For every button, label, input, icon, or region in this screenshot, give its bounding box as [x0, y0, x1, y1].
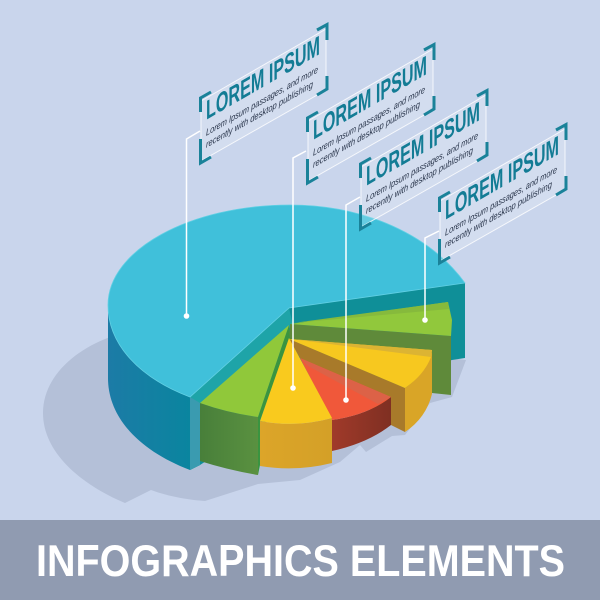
green left edge [258, 325, 290, 475]
red slice [300, 358, 391, 451]
panel 3 heading: LOREM IPSUM [366, 97, 480, 192]
label panel 1 [200, 24, 327, 163]
yellow centre top [260, 338, 332, 424]
red top [300, 358, 391, 420]
pie shadow [43, 337, 466, 503]
yellow right cut side [289, 339, 405, 432]
red back strip [300, 358, 391, 404]
large slice: corner strip [190, 397, 200, 470]
large slice: cut face near corner [190, 308, 293, 470]
panel 3 body line 2: recently with desktop publishing [366, 145, 473, 217]
large slice: top [108, 205, 465, 397]
yellow slice centre [260, 338, 332, 468]
yellow slice right [289, 339, 432, 432]
footer band [0, 520, 600, 600]
panel 3 brackets [360, 90, 487, 229]
leader line 3 [343, 197, 360, 403]
panel 4 brackets [440, 124, 566, 263]
large slice: outer wall [108, 305, 190, 470]
panel 1 body: Lorem Ipsum passages, and more [206, 65, 318, 139]
yellow right outer side [405, 352, 432, 432]
panel 2 heading: LOREM IPSUM [313, 51, 427, 146]
green right side [289, 324, 451, 395]
leader line 4 [422, 231, 439, 323]
green left top [200, 325, 289, 417]
label panel 4 [440, 124, 566, 263]
panel 4 card [440, 129, 565, 261]
red side [332, 397, 391, 451]
panel 2 body: Lorem Ipsum passages, and more [313, 85, 425, 159]
panel 1 brackets [200, 24, 327, 163]
yellow right back strip [291, 339, 432, 357]
yellow right top [289, 339, 432, 388]
panel 3 card [361, 95, 486, 227]
leader line 1 [184, 131, 200, 319]
label panel 3 [360, 90, 487, 229]
green slice left [200, 325, 290, 475]
green left side [200, 403, 258, 475]
green right back strip [293, 302, 449, 323]
large slice: inner cut faces [190, 283, 465, 470]
pie chart [108, 205, 465, 475]
label panel 2 [308, 44, 434, 183]
panel 2 card [308, 49, 433, 181]
panel 4 body line 2: recently with desktop publishing [445, 179, 552, 251]
panel 2 brackets [308, 44, 434, 183]
green right top [290, 302, 452, 336]
leader line 2 [290, 151, 306, 391]
panel 1 body line 2: recently with desktop publishing [206, 79, 313, 151]
panel 3 body: Lorem Ipsum passages, and more [366, 131, 478, 205]
panel 1 card [201, 29, 326, 161]
yellow centre side [260, 418, 332, 468]
panel 4 body: Lorem Ipsum passages, and more [445, 165, 557, 239]
green slice right [289, 302, 452, 395]
panel 2 body line 2: recently with desktop publishing [313, 99, 420, 171]
